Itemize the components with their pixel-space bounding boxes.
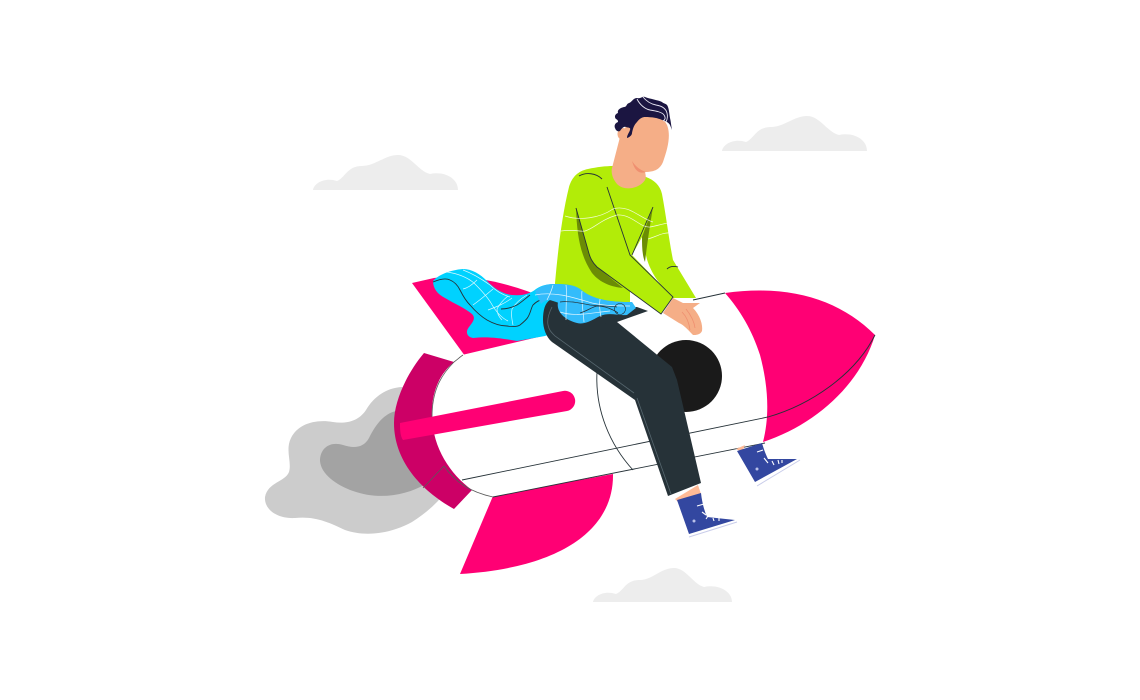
rocket: black porthole — [650, 340, 722, 412]
person: hand — [663, 298, 702, 335]
rocket: nozzle ring — [394, 353, 472, 509]
cloud: upper right — [722, 116, 867, 151]
person: hair — [615, 97, 672, 138]
cloud: upper left — [313, 155, 458, 190]
rocket: bottom fin — [460, 474, 613, 574]
smoke: light outer plume — [265, 387, 447, 534]
rocket: pink stripe — [400, 391, 575, 440]
person: near arm shadow — [576, 208, 623, 288]
cloth: blue shirt tied at the waist — [535, 284, 636, 323]
person: near sleeve — [576, 187, 673, 314]
person: gap between arm and torso — [632, 237, 667, 291]
person: dark trousers — [543, 300, 701, 496]
rocket: top fin — [412, 277, 560, 356]
cloud: bottom — [593, 568, 732, 602]
person: sweater body and far arm — [555, 166, 696, 305]
smoke: dark inner plume — [320, 411, 426, 496]
person: far arm shadow — [642, 207, 653, 262]
rocket: nose cone — [725, 291, 875, 442]
rocket: white body — [432, 293, 765, 497]
person: ear — [618, 128, 628, 140]
person: chin shadow — [632, 161, 646, 173]
shoe: back foot — [736, 443, 800, 486]
shoe: front foot — [675, 485, 737, 537]
person: neck and head — [612, 115, 669, 188]
rocket: body lines — [462, 293, 875, 497]
cloth: cyan shirt draped over the fin — [433, 269, 636, 341]
rocket: nozzle seam — [423, 355, 493, 497]
person: sweater lines — [561, 174, 678, 314]
